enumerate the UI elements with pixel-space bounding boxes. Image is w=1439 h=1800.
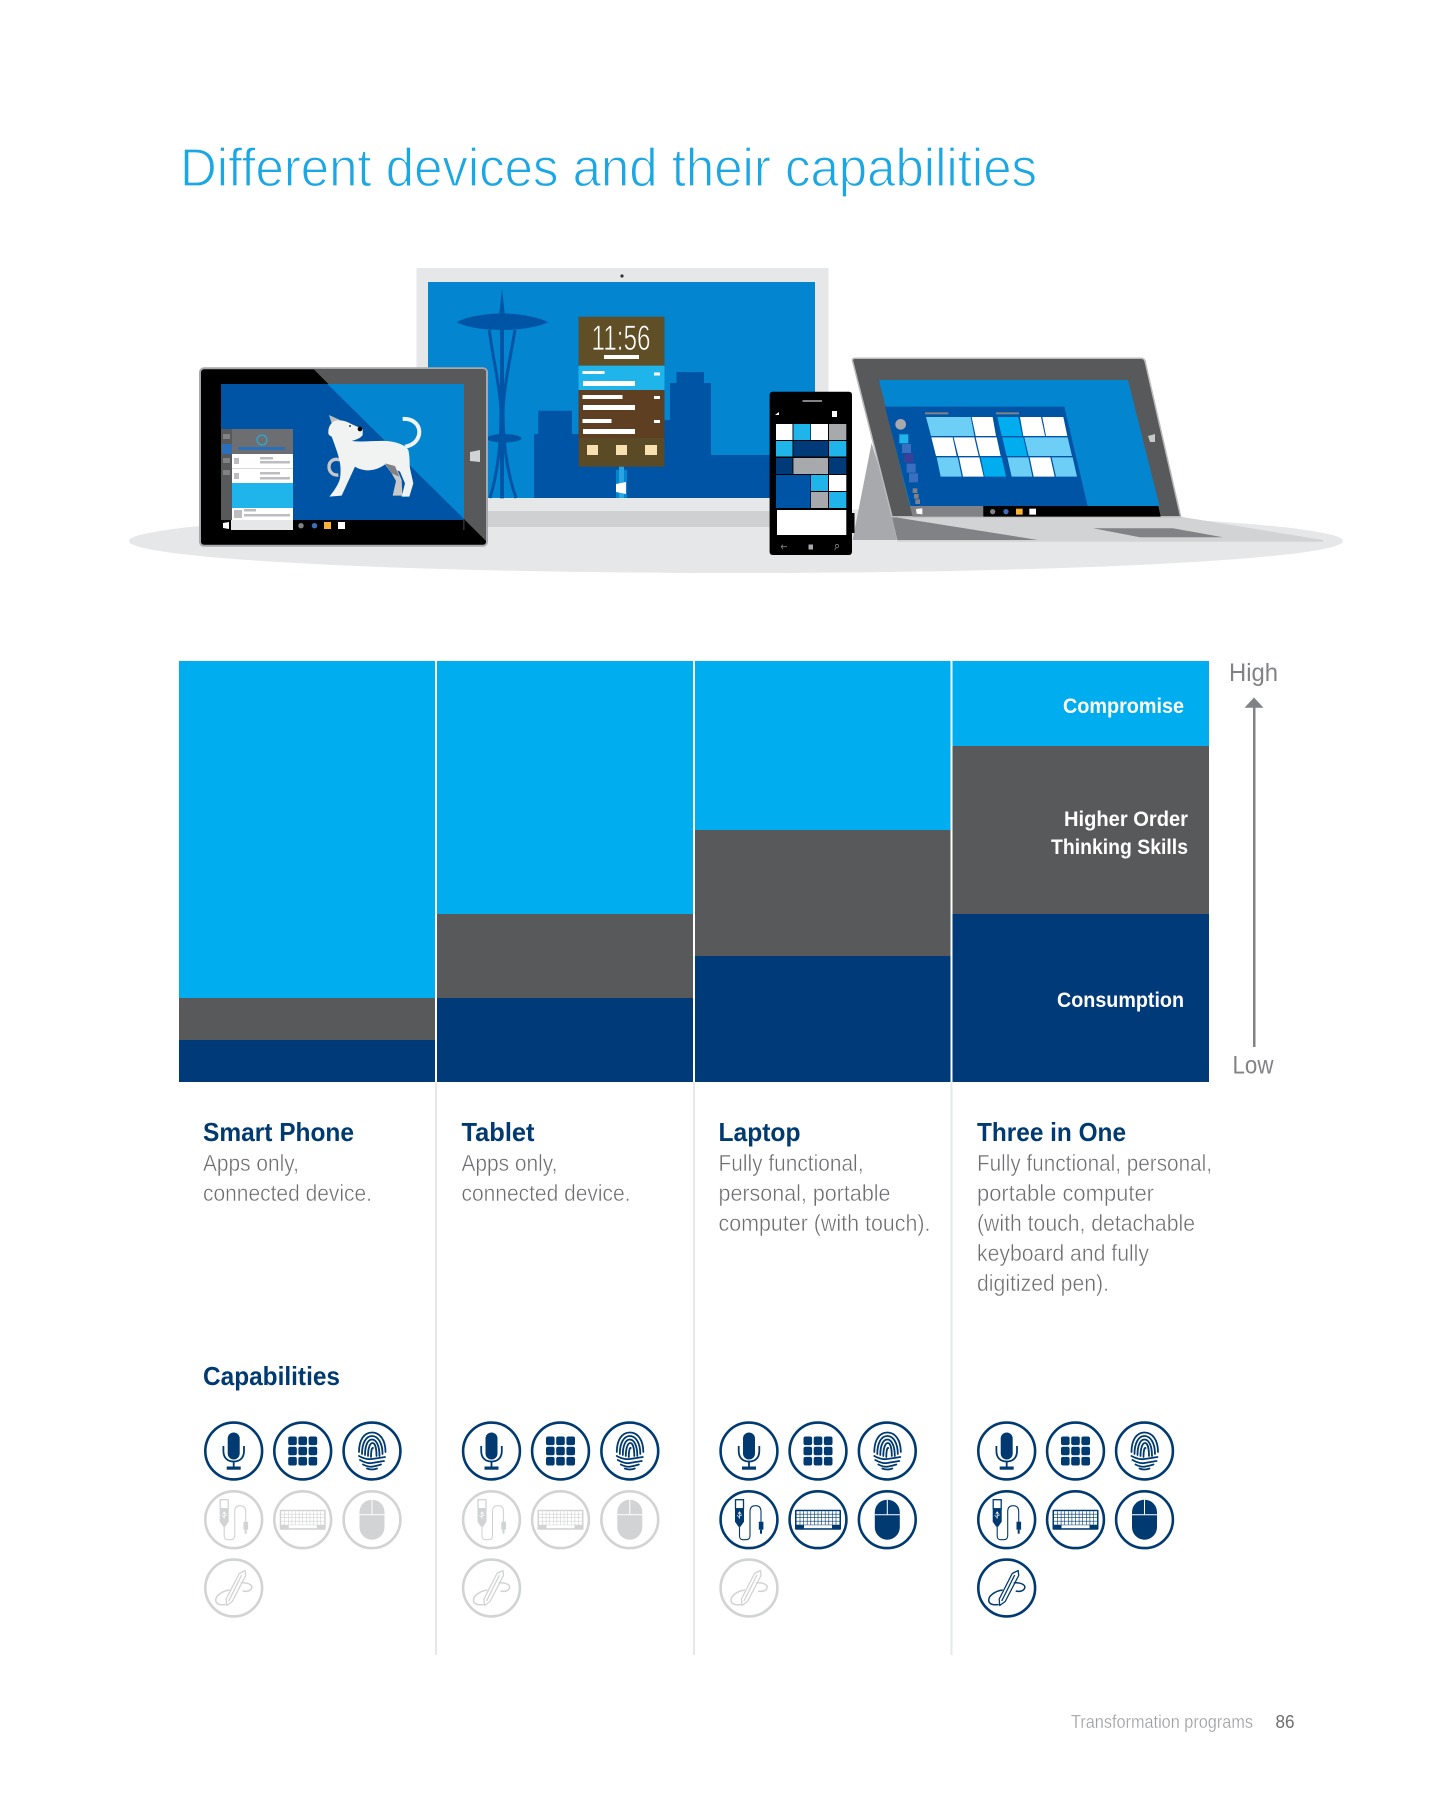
text: three in one: keyboard and fully [977,1240,1149,1266]
tablet start menu [221,429,293,530]
dog illustration [328,415,419,497]
text: three in one: portable computer [977,1180,1154,1206]
column dividers [435,1082,952,1655]
device: phone [770,392,854,555]
text: laptop: computer (with touch). [718,1210,930,1236]
device: three in one [852,358,1323,542]
footer section name: Transformation programs [1071,1712,1253,1732]
text: three in one: Fully functional, personal, [977,1150,1212,1176]
icons: smart phone capabilities [205,1423,400,1616]
start screen [885,407,1161,517]
text: three in one: Three in One [977,1117,1126,1147]
space needle [457,288,548,498]
axis arrow [1244,698,1264,1047]
text: smart phone: connected device. [203,1180,372,1206]
text: tablet: Tablet [462,1117,535,1147]
axis label: high: High [1229,659,1278,687]
label: higher order thinking skills: Higher Order [1064,808,1188,831]
text: smart phone: Smart Phone [203,1117,354,1147]
heading: capabilities: Capabilities [203,1361,340,1391]
text: three in one: (with touch, detachable [977,1210,1195,1236]
scale axis [1229,659,1278,1080]
axis label: low: Low [1232,1052,1274,1080]
device: laptop [416,268,828,527]
text: smart phone: Apps only, [203,1150,299,1176]
hero: four devices on a shadow [129,268,1343,573]
label: consumption: Consumption [1057,989,1184,1012]
title: Different devices and their capabilities [180,138,1037,198]
shadow ellipse [129,509,1343,573]
column: tablet [437,661,693,1082]
column: three in one [952,661,1209,1082]
label: higher order thinking skills [1051,808,1188,859]
text: tablet: connected device. [462,1180,630,1206]
text: laptop: Fully functional, [718,1150,864,1176]
page number: 86 [1276,1712,1294,1732]
label: higher order thinking skills: Thinking Skills [1051,836,1188,859]
text: laptop: personal, portable [718,1180,890,1206]
text: laptop: Laptop [718,1117,800,1147]
text: smart phone [203,1117,372,1206]
text: laptop [718,1117,930,1236]
device: tablet [200,368,487,546]
text: tablet: Apps only, [462,1150,558,1176]
chart: stacked columns per device [179,661,1209,1082]
text: tablet [462,1117,630,1206]
icons: three in one capabilities [978,1423,1173,1616]
text: three in one: digitized pen). [977,1270,1109,1296]
clock time: 11:56 [592,319,650,358]
icons: laptop capabilities [721,1423,916,1616]
text: three in one [977,1117,1212,1296]
label: compromise: Compromise [1063,695,1184,718]
icons: tablet capabilities [463,1423,658,1616]
column: laptop [695,661,950,1082]
column: smart phone [179,661,435,1082]
city skyline [534,372,815,498]
